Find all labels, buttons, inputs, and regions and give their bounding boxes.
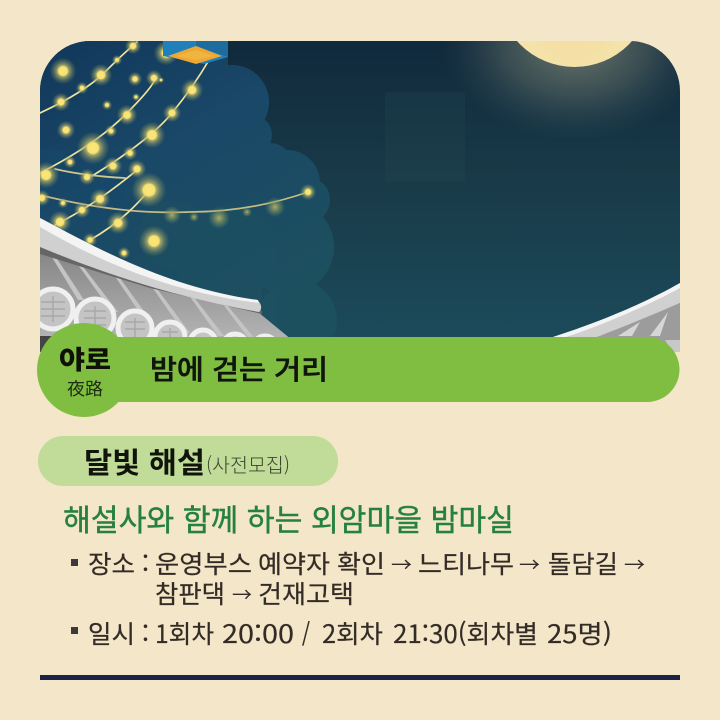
place line 1 [88,545,645,581]
place line 1: 확인 [337,545,385,581]
bullet: time [71,627,78,634]
bar title: 밤에 걷는 거리 [150,347,328,387]
left cloud lobes [28,148,125,220]
place line 1: 느티나무 [418,545,514,581]
string lights wires [40,42,308,240]
left roof [33,218,292,360]
roof ridges [50,254,256,340]
place line 1: 예약자 [258,545,330,581]
full moon [517,41,632,67]
green circle badge [37,323,131,417]
panel: night sky illustration [40,41,680,352]
place line 1: 장소 [88,545,135,581]
fairy lights [33,38,316,259]
bottom rule [40,675,680,680]
roof tile ends [40,286,274,337]
section note: (사전모집) [206,449,290,478]
panel: title bar [37,323,680,417]
place line 1: 돌담길 [548,545,618,581]
place line 2: 참판댁 [155,575,225,611]
place line 1: → [519,549,540,578]
time line: 25명) [547,615,612,651]
roof eave [40,218,261,312]
place line 2: → [232,579,252,608]
subtitle: 해설사와 함께 하는 외암마을 밤마실 [63,496,514,540]
roof white edge [40,218,259,303]
dark corner [40,336,52,352]
time line: 1회차 [155,615,214,651]
tile end patterns [41,296,178,337]
lighter lower clouds [138,201,278,340]
text block: details list [71,545,645,651]
faint square glow [385,92,465,182]
right tile end [665,340,680,352]
time line: 21:30(회차별 [393,615,538,651]
right roof [553,283,680,344]
green bar [84,337,680,402]
place line 1: : [142,545,149,581]
time line: 2회차 [322,615,383,651]
place line 2: 건재고택 [258,575,354,611]
time line: 일시 [88,615,135,651]
time line: 20:00 [222,615,294,651]
clouds [40,41,336,312]
icon: hanging lantern [163,41,228,64]
night sky [40,41,680,352]
time line [88,615,612,651]
badge hanja: 夜路 [67,376,104,401]
place line 1: 운영부스 [155,545,252,581]
time line: / [302,615,310,651]
dim fairy lights [163,197,285,229]
bullet: place [71,559,78,566]
badge title: 야로 [59,340,111,377]
place line 1: → [624,549,645,578]
moon glow [460,41,678,125]
place line 1: → [391,549,412,578]
panel: section heading pill [38,436,338,486]
section heading: 달빛 해설 [84,440,205,482]
roof slope [40,250,292,340]
time line: : [142,615,149,651]
place line 2 [155,575,354,611]
roof shadow band [40,246,262,314]
